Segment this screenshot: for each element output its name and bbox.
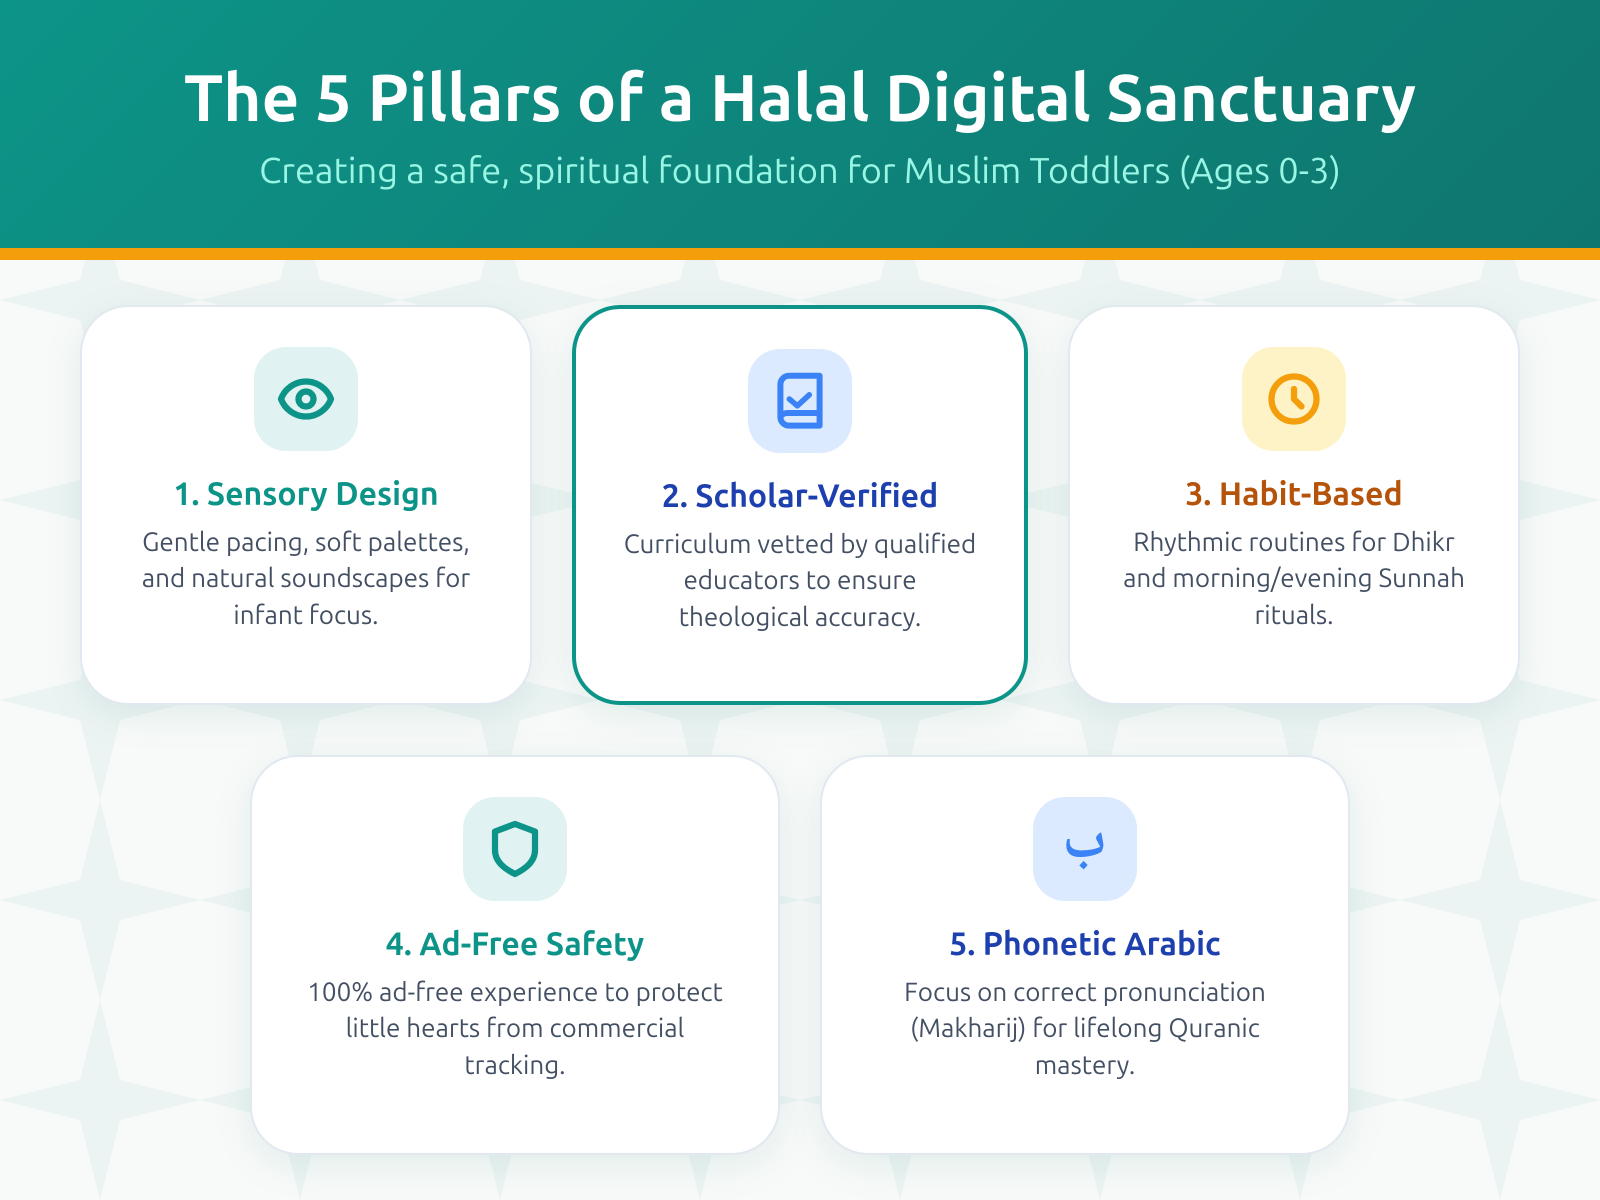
icon: clock — [1242, 347, 1346, 451]
icon: arabic letter — [1033, 797, 1137, 901]
icon: arabic letter: ب — [1062, 797, 1108, 893]
description: and natural soundscapes for — [142, 563, 470, 592]
panel: habit-based — [1068, 305, 1520, 705]
subtitle: Creating a safe, spiritual foundation for Muslim Toddlers (Ages 0-3) — [259, 149, 1341, 190]
description — [142, 527, 470, 629]
description — [904, 977, 1266, 1079]
description: and morning/evening Sunnah — [1123, 563, 1465, 592]
description: infant focus. — [233, 600, 379, 629]
header banner — [0, 0, 1600, 260]
description — [307, 977, 723, 1079]
panel: ad-free safety — [250, 755, 780, 1155]
description: rituals. — [1254, 600, 1334, 629]
description: 100% ad-free experience to protect — [307, 977, 723, 1006]
icon: shield — [463, 797, 567, 901]
icon: book with check — [748, 349, 852, 453]
heading: 3. Habit-Based — [1185, 476, 1403, 512]
heading: 5. Phonetic Arabic — [949, 926, 1221, 962]
description: mastery. — [1035, 1050, 1135, 1079]
description — [1123, 527, 1465, 629]
heading: 4. Ad-Free Safety — [386, 926, 644, 962]
description: (Makharij) for lifelong Quranic — [910, 1013, 1260, 1042]
panel: scholar-verified — [572, 305, 1028, 705]
description: educators to ensure — [683, 565, 917, 594]
description: Gentle pacing, soft palettes, — [142, 527, 470, 556]
heading: 1. Sensory Design — [173, 476, 439, 512]
panel: phonetic arabic — [820, 755, 1350, 1155]
title: The 5 Pillars of a Halal Digital Sanctuary — [184, 61, 1416, 134]
description: Rhythmic routines for Dhikr — [1133, 527, 1455, 556]
description: tracking. — [464, 1050, 566, 1079]
heading: 2. Scholar-Verified — [662, 478, 938, 514]
description: theological accuracy. — [679, 602, 921, 631]
description: Focus on correct pronunciation — [904, 977, 1266, 1006]
panel: sensory design — [80, 305, 532, 705]
description — [624, 529, 976, 631]
description: little hearts from commercial — [346, 1013, 684, 1042]
icon: eye — [254, 347, 358, 451]
description: Curriculum vetted by qualified — [624, 529, 976, 558]
